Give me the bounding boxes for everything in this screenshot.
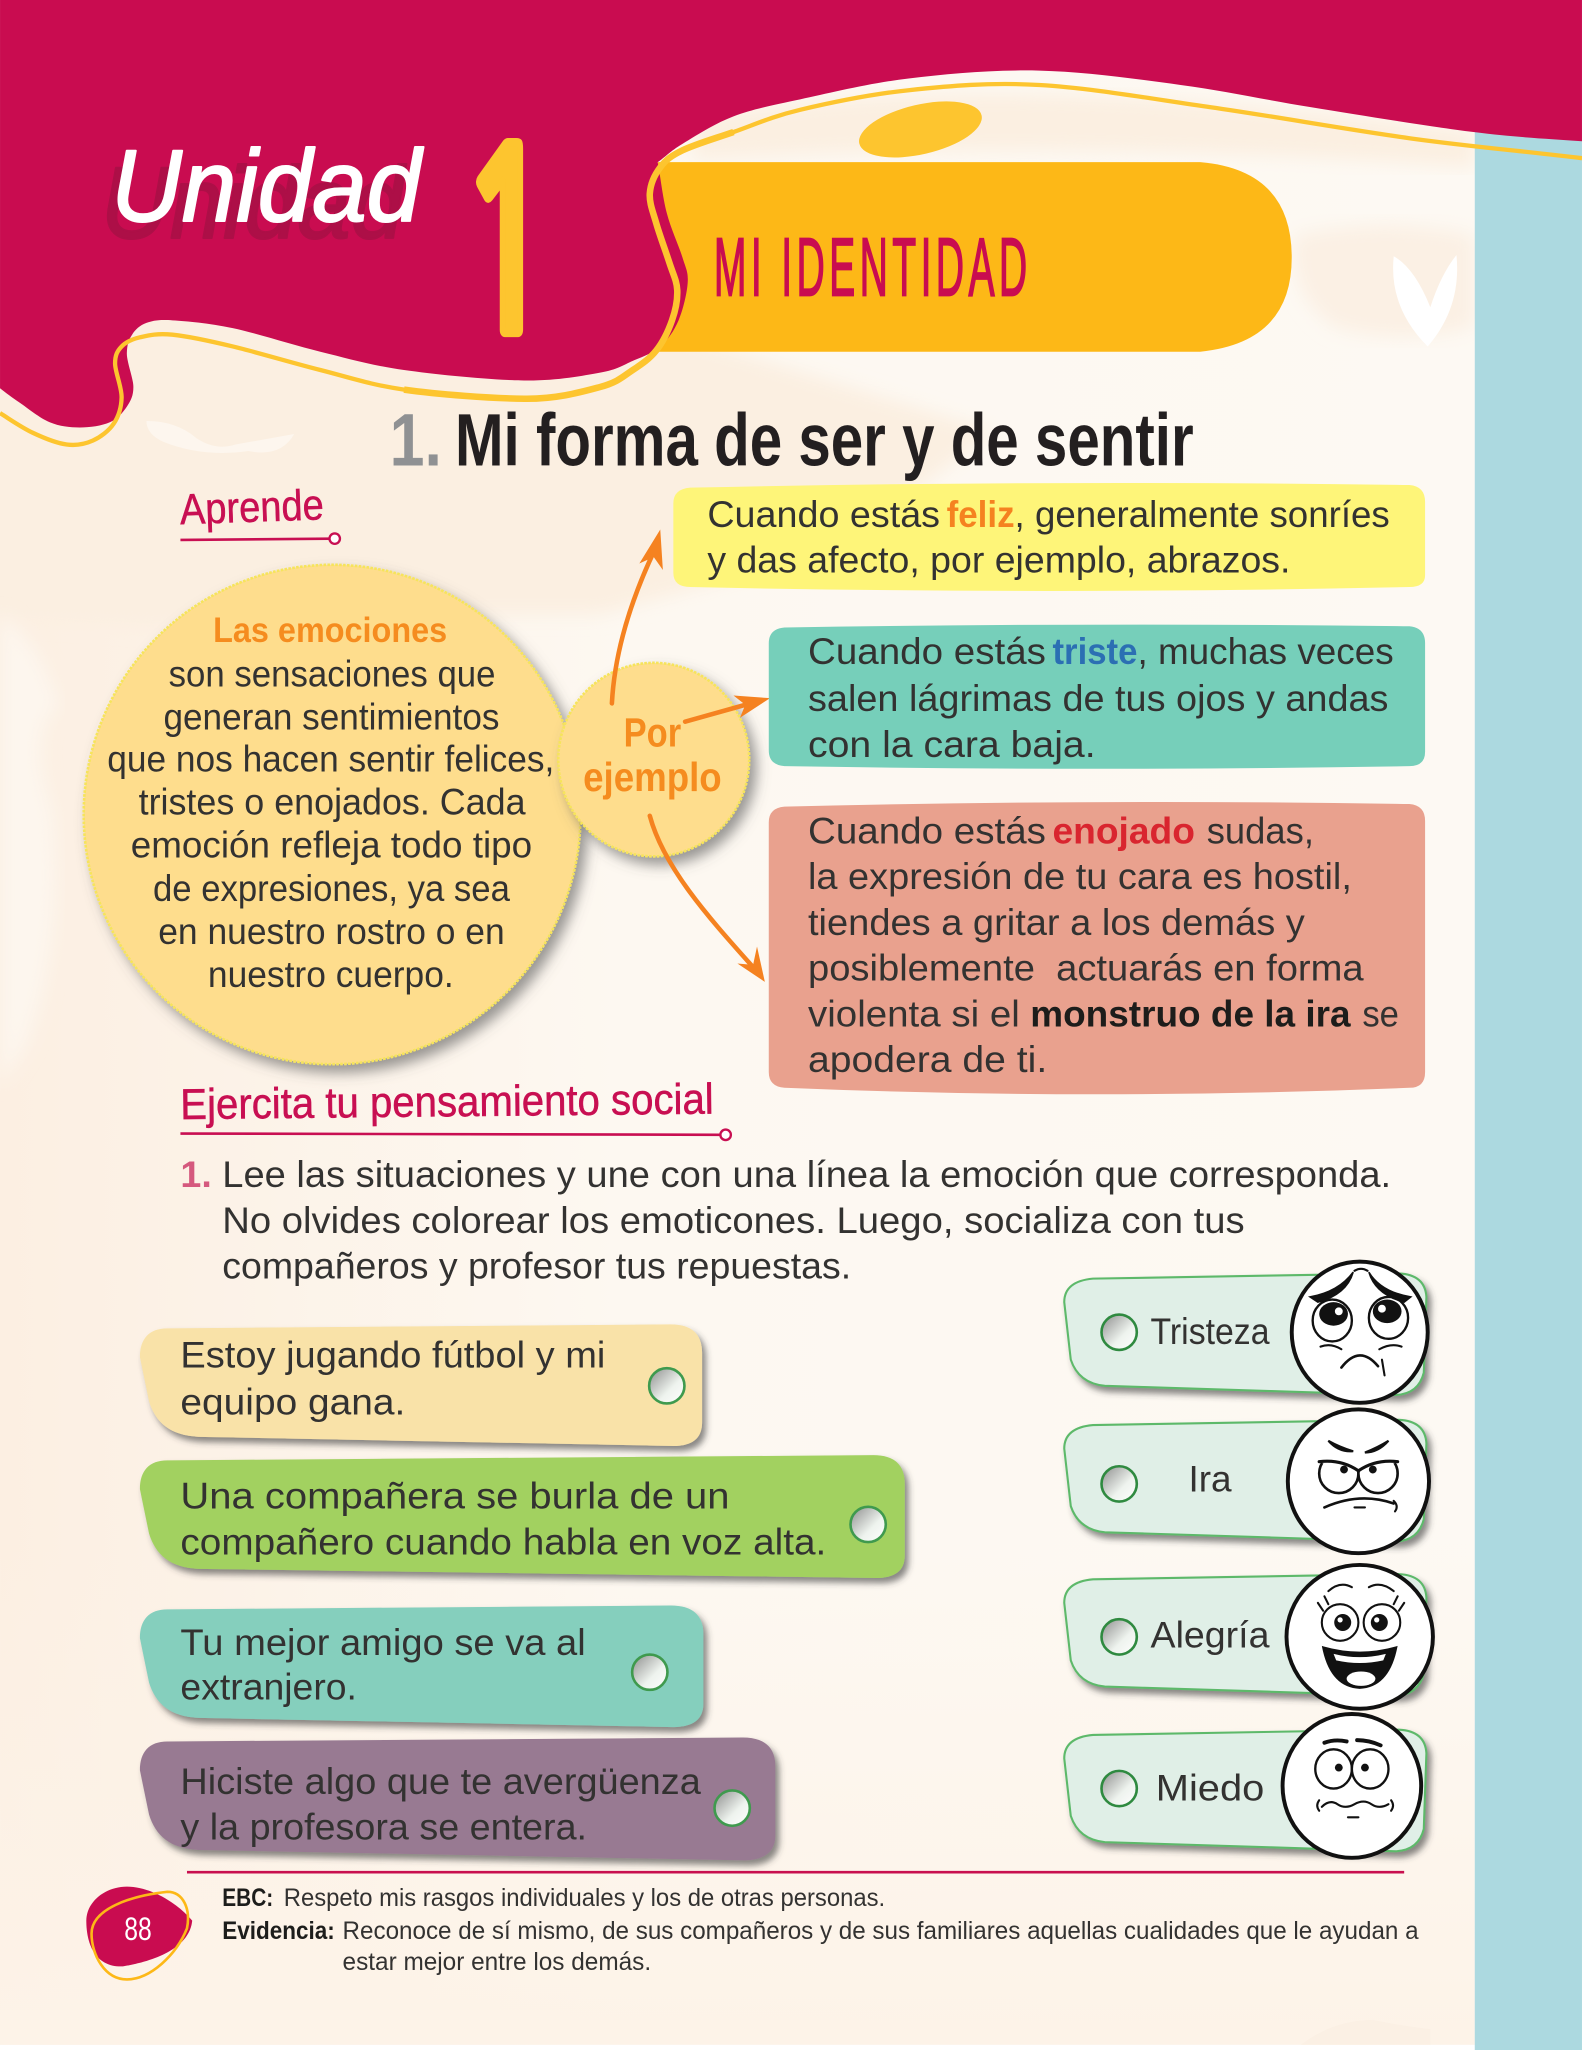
panel: enojado example: apodera de ti.	[808, 1039, 1047, 1080]
footer divider	[187, 1871, 1404, 1874]
section heading: Ejercita tu pensamiento social: Ejercita tu pensamiento social	[180, 1076, 714, 1129]
icon: happy face	[1287, 1565, 1433, 1709]
emotion tag: Ira: Ira	[1188, 1459, 1232, 1500]
situation card: fútbol: Estoy jugando fútbol y mi	[180, 1335, 605, 1376]
panel: triste example: con la cara baja.	[808, 724, 1096, 765]
panel: las emociones circle: en nuestro rostro o en	[158, 911, 505, 952]
panel: las emociones circle: generan sentimientos	[163, 697, 499, 738]
situation card: amigo: extranjero.	[180, 1667, 357, 1708]
text: MI IDENTIDAD	[714, 221, 1032, 313]
footer text: Reconoce de sí mismo, de sus compañeros y de sus familiares aquellas cualidades que le ayudan a	[343, 1918, 1419, 1945]
emotion tag: Tristeza: Tristeza	[1151, 1311, 1270, 1352]
panel: triste example: Cuando estás	[808, 631, 1046, 672]
arrow: to enojado	[650, 816, 765, 982]
panel: feliz example: y das afecto, por ejemplo, abrazos.	[707, 540, 1290, 581]
panel: enojado example: enojado	[1052, 810, 1195, 851]
footer text: EBC:	[222, 1885, 273, 1912]
instructions text: compañeros y profesor tus repuestas.	[222, 1246, 851, 1287]
situation card: fútbol	[140, 1324, 702, 1446]
instructions text: 1.	[180, 1154, 212, 1195]
unit heading: Unidad: Unidad	[111, 129, 424, 243]
right teal strip	[1475, 128, 1582, 2050]
panel: las emociones circle: nuestro cuerpo.	[208, 954, 454, 995]
unit number 1: 1	[458, 121, 558, 370]
section heading: Aprende: Aprende	[179, 481, 325, 534]
lesson title: Mi forma de ser y de sentir	[455, 398, 1194, 481]
panel: enojado example: posiblemente actuarás en forma	[808, 948, 1364, 989]
emotion tag: Alegría: Alegría	[1151, 1614, 1270, 1655]
emotion tag: Alegría	[1064, 1574, 1426, 1696]
panel: por ejemplo circle	[558, 663, 749, 856]
panel: triste example: triste	[1052, 631, 1137, 672]
icon: fear face	[1283, 1714, 1421, 1858]
situation card: amigo: Tu mejor amigo se va al	[180, 1622, 586, 1663]
panel: feliz example	[673, 483, 1425, 591]
panel: enojado example: monstruo de la ira	[1030, 993, 1351, 1034]
footer text: Respeto mis rasgos individuales y los de otras personas.	[284, 1885, 885, 1912]
crimson header shape	[0, 0, 1582, 428]
emotion tag: Miedo	[1064, 1730, 1426, 1851]
emotion tag: Miedo: Miedo	[1156, 1767, 1264, 1808]
instructions text: No olvides colorear los emoticones. Luego, socializa con tus	[222, 1200, 1245, 1241]
page number badge: 88	[124, 1910, 152, 1947]
panel: triste example: salen lágrimas de tus ojos y andas	[808, 678, 1388, 719]
yellow accent ellipse	[854, 91, 987, 168]
situation card: vergüenza: y la profesora se entera.	[180, 1807, 587, 1848]
unit heading: Unidad: Unidad	[101, 146, 407, 260]
panel: enojado example: tiendes a gritar a los demás y	[808, 902, 1306, 943]
panel: las emociones circle: tristes o enojados. Cada	[139, 782, 526, 823]
panel: enojado example	[769, 802, 1425, 1094]
footer text: Evidencia:	[222, 1918, 335, 1945]
situation card: burla: Una compañera se burla de un	[180, 1476, 730, 1517]
panel: las emociones circle: Las emociones	[213, 611, 447, 650]
panel: las emociones circle: son sensaciones que	[169, 653, 496, 694]
situation card: burla: compañero cuando habla en voz alta.	[180, 1521, 826, 1562]
situation card: fútbol: equipo gana.	[180, 1382, 405, 1423]
arrow: to triste	[685, 696, 770, 722]
emotion tag: Ira	[1064, 1420, 1426, 1541]
emotion tag: Tristeza	[1064, 1273, 1426, 1395]
icon: sad face	[1292, 1262, 1428, 1403]
panel: enojado example: la expresión de tu cara es hostil,	[808, 856, 1352, 897]
footer text: estar mejor entre los demás.	[343, 1949, 651, 1976]
panel: por ejemplo circle: ejemplo	[583, 754, 722, 800]
yellow title pill	[658, 162, 1292, 352]
panel: las emociones circle	[84, 565, 581, 1064]
panel: enojado example: sudas,	[1207, 810, 1314, 851]
panel: enojado example: Cuando estás	[808, 810, 1046, 851]
panel: feliz example: Cuando estás	[707, 494, 940, 535]
lesson title: 1.	[390, 398, 442, 481]
panel: las emociones circle: de expresiones, ya sea	[153, 868, 511, 909]
footer text	[222, 1885, 1419, 1976]
panel: por ejemplo circle: Por	[624, 710, 681, 756]
situation card: vergüenza	[140, 1738, 775, 1860]
situation card: burla	[140, 1455, 905, 1578]
icon: angry face	[1288, 1409, 1429, 1553]
panel: triste example	[769, 625, 1425, 769]
panel: las emociones circle: que nos hacen sentir felices,	[107, 738, 554, 779]
yellow wave line	[0, 84, 1582, 445]
instructions text: Lee las situaciones y une con una línea la emoción que corresponda.	[222, 1154, 1391, 1195]
panel: feliz example: , generalmente sonríes	[1015, 494, 1390, 535]
situation card: amigo	[140, 1605, 703, 1727]
instructions text	[180, 1154, 1391, 1287]
page number badge	[86, 1887, 192, 1979]
arrow: to feliz	[612, 529, 663, 703]
panel: enojado example: violenta si el	[808, 993, 1020, 1034]
situation card: vergüenza: Hiciste algo que te avergüenza	[180, 1761, 701, 1802]
panel: feliz example: feliz	[947, 494, 1015, 535]
panel: las emociones circle: emoción refleja todo tipo	[131, 825, 532, 866]
panel: triste example: , muchas veces	[1137, 631, 1394, 672]
panel: enojado example: se	[1362, 993, 1399, 1034]
